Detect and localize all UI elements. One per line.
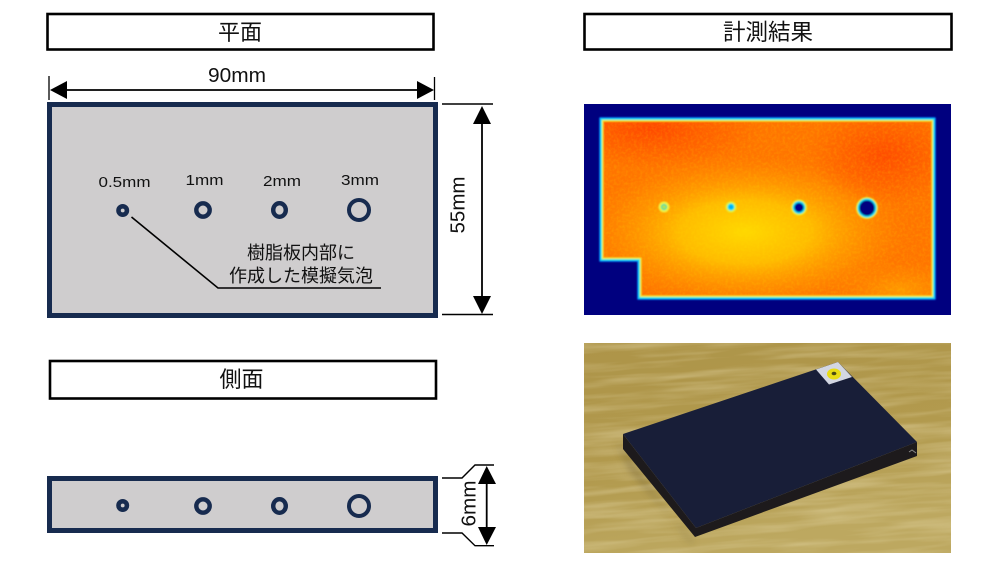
panel: side view of resin plate: [50, 478, 436, 530]
bubble response: 1mm: [726, 202, 736, 212]
dimension arrow: height 55mm: [442, 104, 493, 314]
white marker: [816, 362, 852, 384]
chart: thermal measurement heat map: [584, 104, 951, 315]
bubble: 2mm: [273, 203, 286, 217]
leader line: [132, 217, 381, 288]
plate side: [623, 434, 917, 537]
dimension arrow: thickness 6mm: [442, 465, 496, 546]
bubble response: 2mm: [791, 200, 807, 216]
panel: plan view of resin plate: [50, 104, 436, 316]
bubble: 1mm: [196, 203, 210, 217]
callout text: 樹脂板内部に: [247, 243, 355, 263]
corner notch: [909, 450, 916, 453]
side bubble: 0.5mm: [118, 501, 127, 510]
dimension arrow: width 90mm: [49, 65, 434, 100]
photo: resin plate on wooden table: [584, 343, 951, 553]
callout text: 作成した模擬気泡: [229, 266, 373, 286]
title: plan view: 平面: [218, 20, 262, 45]
sticker mark: [832, 372, 836, 375]
wooden table: [584, 343, 951, 553]
plate top: [623, 362, 917, 528]
title: side view: [50, 361, 436, 398]
bubble: 3mm: [349, 200, 369, 220]
specimen surface: [604, 122, 932, 296]
side bubble: 2mm: [273, 499, 286, 513]
yellow sticker: [827, 368, 841, 380]
dimension arrow: thickness 6mm: 6mm: [458, 480, 480, 526]
title: measurement result: 計測結果: [723, 20, 813, 45]
specimen outline glow: [600, 118, 935, 299]
side bubble: 3mm: [349, 496, 369, 516]
label: 1mm: 1mm: [186, 173, 224, 189]
bubble response: 3mm: [856, 197, 878, 219]
dimension arrow: width 90mm: 90mm: [208, 65, 266, 87]
label: 2mm: 2mm: [263, 174, 301, 190]
dimension arrow: height 55mm: 55mm: [448, 176, 470, 234]
title: plan view: [48, 14, 434, 50]
label: 3mm: 3mm: [341, 173, 379, 189]
title: measurement result: [584, 14, 952, 50]
bubble: 0.5mm: [118, 206, 127, 215]
wood grain: [584, 343, 951, 553]
bubble response: 0.5mm: [658, 202, 670, 212]
side bubble: 1mm: [196, 499, 210, 513]
plate shadow: [620, 448, 691, 540]
surface grain: [604, 122, 931, 295]
label: 0.5mm: 0.5mm: [98, 175, 150, 191]
title: side view: 側面: [219, 367, 264, 392]
